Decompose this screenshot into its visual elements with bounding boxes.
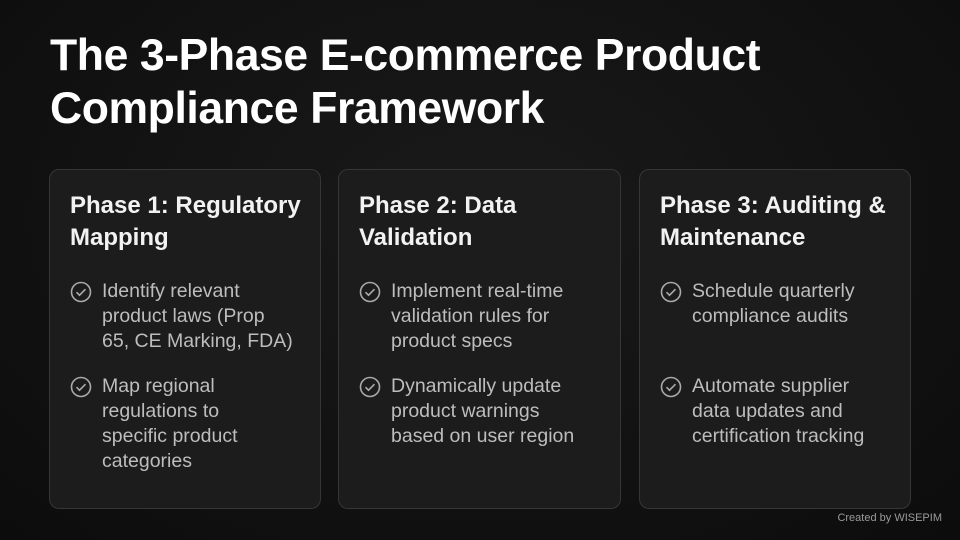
item: supplier updates: certification tracking [692, 425, 864, 447]
item: supplier updates: data updates and [692, 400, 843, 422]
item: validation rules: validation rules for [391, 305, 549, 327]
item: audits: compliance audits [692, 305, 848, 327]
heading: phase 1: Mapping [70, 224, 169, 251]
item: supplier updates: Automate supplier [692, 375, 849, 397]
panel: phase 3 [639, 169, 911, 509]
item: validation rules: Implement real-time [391, 280, 563, 302]
item: audits [660, 280, 855, 327]
item: identify laws [70, 280, 293, 352]
heading: phase 3: Phase 3: Auditing & [660, 192, 886, 219]
item: update warnings: based on user region [391, 425, 574, 447]
item: map regulations: categories [102, 450, 192, 472]
item: identify laws: Identify relevant [102, 280, 240, 302]
item: map regulations: specific product [102, 425, 237, 447]
panel: phase 1 [49, 169, 321, 509]
title: The 3-Phase E-commerce Product [50, 31, 760, 80]
item: update warnings: product warnings [391, 400, 540, 422]
panel: phase 2 [338, 169, 621, 509]
item: validation rules [360, 280, 563, 352]
item: map regulations: regulations to [102, 400, 219, 422]
item: validation rules: product specs [391, 330, 512, 352]
footer credit: Created by WISEPIM [837, 512, 942, 524]
heading: phase 3 [660, 192, 886, 251]
title: Compliance Framework [50, 84, 544, 133]
item: map regulations: Map regional [102, 375, 215, 397]
item: supplier updates [660, 375, 864, 447]
item: audits: Schedule quarterly [692, 280, 855, 302]
item: identify laws: 65, CE Marking, FDA) [102, 330, 293, 352]
heading: phase 3: Maintenance [660, 224, 805, 251]
heading: phase 1: Phase 1: Regulatory [70, 192, 301, 219]
heading: phase 2: Validation [359, 224, 472, 251]
heading: phase 2: Phase 2: Data [359, 192, 516, 219]
heading: phase 1 [70, 192, 301, 251]
title [50, 31, 760, 133]
item: update warnings: Dynamically update [391, 375, 561, 397]
item: update warnings [360, 375, 574, 447]
item: identify laws: product laws (Prop [102, 305, 265, 327]
item: map regulations [70, 375, 238, 472]
heading: phase 2 [359, 192, 516, 251]
